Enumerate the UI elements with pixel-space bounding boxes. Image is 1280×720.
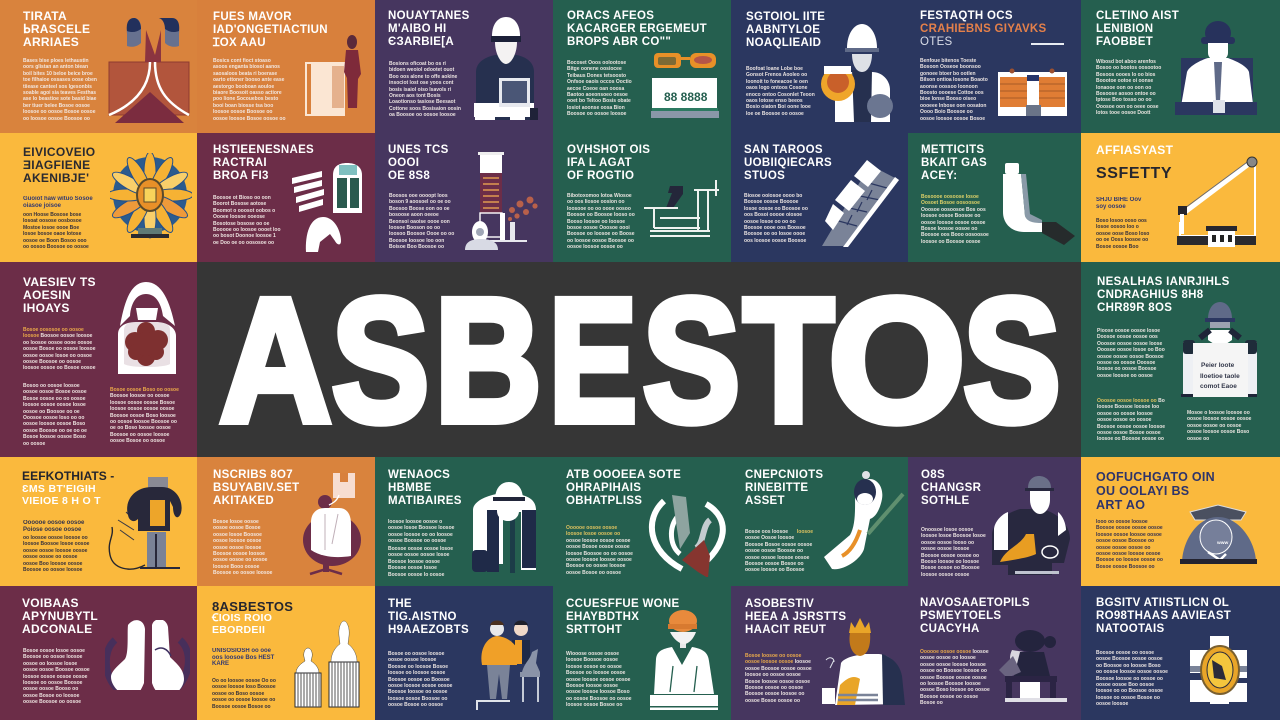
panel: hunched person [908, 586, 1081, 720]
decorative rule [1031, 43, 1064, 45]
heading: 8ASBESTOS [212, 599, 293, 614]
icon: strips head lungs [292, 163, 362, 252]
heading: SGTOIOL IITE AABNTYLOE NOAQLIEAID [746, 11, 825, 49]
icon: welder with helmet [821, 24, 893, 122]
icon: gray bell [1180, 504, 1257, 564]
title: asbestos: T [743, 263, 834, 457]
heading: THE TIG.AISTNO H9AAEZOBTS [388, 598, 469, 636]
icon: worker holding sign: Peier Ioote [1201, 362, 1235, 369]
panel: strips and lungs [197, 133, 375, 262]
heading: TIRATA ᖯRASCELE ARRIAES [23, 9, 90, 49]
icon: curved loops [648, 495, 726, 577]
icon: column and robot [465, 152, 538, 250]
text block: Mosoe o Ioosoe Ioosoe oo oosoe Ioosoe oosoe oosoe oosoe oosoe oo oosoe oosoe Ioosoe oosoe Boso oosoe oo [1187, 410, 1251, 442]
panel: worker in mask [375, 457, 553, 586]
panel: fibre labour [197, 0, 375, 133]
panel: welder [731, 0, 908, 133]
heading: WENAOCS HBMBE MATIBAIRES [388, 469, 462, 507]
icon: lungs and airway [108, 18, 190, 123]
icon: diagonal bricks [822, 160, 899, 247]
icon: inspector with bottle [992, 476, 1070, 575]
text block: Bosoo oo oosoe Ioosoe oosoe oosoe Bosoe oosoe Bosoe oosoe oo oo oosoe Ioosoe oosoe oosoe Iosoe oosoe oo Boosoe oo oe Ooosoe oosoe Ioso oo oo oosoe Ioosoe oosoe Boso oosoe Boosoe oo oe oo oe Bosoe Ioosoe oosoe Boso oo oosoe [23, 383, 87, 447]
panel: inhaler [908, 133, 1081, 262]
heading: VAESIEV TS AOESIN IHOAYS [23, 275, 96, 315]
panel: gold seal [1081, 586, 1280, 720]
heading: AFFIASYAST [1096, 143, 1173, 157]
icon: gray bell: WWW [1217, 540, 1229, 545]
subheading: UNISOSIOSH oo ooe oos Ioosoe Bos HEST KARE [212, 648, 274, 667]
heading: HSTIEENESNAES RACTRAI BROA FI3 [213, 144, 314, 182]
icon: machine operator [108, 477, 182, 570]
icon: gold-faced man [822, 618, 905, 705]
icon: orange crates [998, 68, 1067, 116]
icon: figures on barred cylinders [294, 620, 360, 708]
panel: inspector [908, 457, 1081, 586]
panel: crates [908, 0, 1081, 133]
panel: bench [553, 133, 731, 262]
icon: crane [1177, 156, 1258, 247]
text block: Bosoe Ioosoe oo oosoe oosoe Ioosoe oosoe Ioosoe oosoe Boosoe oosoe oosoe Ioosoe oo oosoe oosoe Bosoe Ioosoe oosoe oosoe Boosoe oosoe oo oosoe Boosoe oosoe Ioosoe oo oosoe Bosoe oosoe oo [745, 653, 812, 704]
text block: Bosoe oo oosoe Ioosoe oosoe oosoe Ioosoe Boosoe oo Ioosoe Bosoe Ioosoe oo Ioosoe oosoe Boosoe oosoe oo Boosoe oosoe Ioosoe oosoe oosoe Boosoe Ioosoe oo oosoe Ioosoe oosoe Boosoe oo oosoe Bosoe oo oosoe [388, 651, 452, 708]
heading: EEFKOTHIATS - [22, 469, 114, 483]
subheading: SHJU BIHE Oov soy oosoe [1096, 197, 1141, 210]
heading: VOIBAAS APYNUBYTL ADCONALE [22, 596, 98, 636]
panel: fan diagram [0, 133, 197, 262]
icon: hunched person at desk [999, 630, 1067, 702]
panel: person in orange hat [553, 586, 731, 720]
subheading: Oooooe oosoe oosoe Poiose oosoe oosoe [23, 520, 84, 533]
text block: Boosoe oosoe oo oosoe oosoe Boosoe oosoe oosoe oo Boosoe oo Ioosoe Boso oo oosoe Ioosoe oosoe oosoe Boosoe Ioosoe oo oosoe oo oosoe oosoe Boo oosoe Ioosoe oo oo Boosoe oosoe Ioosoe oo oosoe Bosoe oo oosoe Ioosoe [1096, 650, 1168, 707]
text block: Wiooose oosoe oosoe Ioosoe Boosoe oosoe Ioosoe oosoe oo oosoe Boosoe oo Ioosoe oosoe oosoe Ioosoe oosoe oosoe Boosoe Ioosoe oosoe oosoe Ioosoe Ioosoe Boso oo oosoe Boosoe oo oosoe Ioosoe oosoe Bosoe oo [566, 651, 632, 708]
panel: white lungs [0, 586, 197, 720]
icon: inhaler [1003, 163, 1075, 245]
panel: lung airways [0, 0, 197, 133]
text block: Bibotoxomoo Iotoa Wiosoe oo oos Iiosoe oosion oo Ioosooe oo oo oooe oosoo Boosoe oo Boosoe Iooso oo Booso Ioosoe oo Ioosoe bosoe oosoe Ooosoe oooi Boosoe oo Ioosoe oo Boose oo Ioosoe oosoe Boosoe oo oosoe Ioosoe oosoe oo [567, 193, 635, 250]
heading: UNES TCS OOOI OE 8S8 [388, 144, 449, 182]
heading: BGSITV ATIISTLICN OL RO98THAAS AAVIEAST NATOOTAIS [1096, 597, 1231, 635]
heading: FESTAQTH OCS CRAHIEBNS GIYAVKS OTES [920, 10, 1047, 48]
panel: smock on chair [197, 457, 375, 586]
panel: machine operator [0, 457, 197, 586]
text block: Ooosoe oosoe Ioosoe oo Bo Ioosoe Boosoe Ioosoe Ioo oosoe oo oosoe Ioosoe oosoe oosoe oo oosoe Boosoe oosoe oosoe Ioosoe oosoe oosoe Bosoe oosoe Ioosoe oo Boosoe oosoe oo [1097, 398, 1165, 442]
panel: two people [375, 586, 553, 720]
icon: two people and desk [476, 620, 540, 710]
heading: O8S CHANGSR SOTHLE [921, 469, 981, 507]
icon: person with chest blotch [118, 282, 176, 374]
icon: worker holding sign: comot Eaoe [1200, 383, 1237, 390]
panel: white pipe [731, 457, 908, 586]
heading: SAN TAROOS UOBIIQIECARS STUOS [744, 144, 832, 182]
heading: CCUESFFUE WONE EHAYBDTHX SRTTOHT [566, 598, 679, 636]
title: asbestos: O [828, 263, 965, 457]
heading: OVHSHOT OIS IFA L AGAT OF ROGTIO [567, 144, 650, 182]
panel: roof bricks [731, 133, 908, 262]
panel: gold-faced man [731, 586, 908, 720]
heading: NSCRIBS 8O7 BSUYABIV.SET AKITAKED [213, 469, 299, 507]
heading: ATB OOOEEA SOTE OHRAPIHAIS OBHATPLISS [566, 469, 681, 507]
heading: OOFUCHGATO OIN OU OOLAYI BS ART AO [1096, 470, 1215, 512]
icon: gear with gold seal [1190, 636, 1247, 704]
panel: worker with sign [1081, 262, 1280, 457]
heading: ORACS AFEOS KACARGER ERGEMEUT BROPS ABR CO"" [567, 10, 707, 48]
heading: NOUAYTANES M'AIBO HI ЄЗARBIE[A [388, 10, 470, 48]
title: asbestos: E [549, 262, 637, 457]
text block: Ioosoe [797, 529, 813, 535]
heading: CNEPCNIOTS RINEBITTE ASSET [745, 469, 823, 507]
title: asbestos: A [220, 263, 331, 457]
icon: masked worker [472, 482, 536, 573]
text block: Iooo oo oosoe Ioosoe Boosoe oosoe oosoe oosoe Ioosoe oosoe Ioosoe oosoe oosoe oosoe Boosoe oo oosoe oosoe oosoe oo oosoe oosoe Ioosoe oosoe Boosoe oo Ioosoe oosoe oo Bosoe oosoe Boosoe oo [1096, 519, 1163, 570]
title: asbestos [218, 262, 1061, 457]
panel: officer [1081, 0, 1280, 133]
title: asbestos: S [643, 263, 740, 457]
title: asbestos: S [963, 263, 1061, 457]
title: asbestos: B [435, 263, 542, 457]
heading: FUES MAVOR IAD'ONGETIACTIUN ꞮOX AAU [213, 11, 328, 49]
icon: bench frame [644, 180, 719, 237]
heading: METTICITS BKAIT GAS ACEY: [921, 144, 987, 182]
title panel [197, 262, 1081, 457]
text block: Oooooe oosoe oosoe Ioosoe oosoe oosoe oo Ioosoe oosoe oosoe Ioosoe Ioosoe oosoe oo Boosoe Ioosoe oo oosoe Boosoe oosoe oosoe oo Ioosoe Boosoe Ioosoe oosoe Boso Ioosoe oo oosoe Boosoe oosoe oo oosoe Bosoe oo [920, 649, 990, 706]
icon: lungs [105, 620, 190, 690]
icon: worker holding sign [1181, 302, 1257, 397]
icon: sun fan [110, 153, 192, 238]
panel: column instrument [375, 133, 553, 262]
panel: protective mask [375, 0, 553, 133]
heading: safety: SSFETTY [1096, 165, 1172, 182]
icon: white pipe and brush [824, 471, 904, 570]
heading: NESALHAS IANRJIHLS CNDRAGHIUS 8H8 CHR89R 8OS [1097, 276, 1230, 314]
panel: gear and sign [553, 0, 731, 133]
panel: bell hazard [1081, 457, 1280, 586]
icon: worker holding sign: Iloetioe taole [1200, 373, 1240, 380]
subheading: Guoiot haw wituo Sosoe oiasoe joisoe [23, 196, 93, 209]
heading: ASOBESTIV HEEA A JSRSTTS HAACIT REUT [745, 598, 846, 636]
heading: EIVICOVEIO ƎIAGFIENE AKENIBJE' [23, 145, 95, 185]
icon: person and panel [305, 35, 361, 116]
panel: bent curves [553, 457, 731, 586]
panel: barred cylinders [197, 586, 375, 720]
panel: safety crane [1081, 133, 1280, 262]
heading: NAVOSAAETOPILS PSMEYTOELS CUACYHA [920, 597, 1030, 635]
icon: masked worker with laptop [474, 17, 538, 120]
icon: person with orange hat [650, 610, 718, 710]
panel: chest diagram [0, 262, 197, 457]
icon: man in shirt [1175, 21, 1257, 115]
icon: goggles and sign: 88 8888 [664, 90, 708, 104]
icon: smock and chair [303, 473, 361, 576]
subheading: ƐMS BT'EIGIH VIEIOE 8 H O T [22, 483, 101, 506]
title: asbestos: S [332, 263, 429, 457]
subheading: ꞒIOIS ROIO EBORDEII [212, 612, 272, 636]
heading: CLETINO AIST LENIBION FAOBBET [1096, 10, 1179, 48]
icon: goggles and sign [651, 53, 719, 118]
